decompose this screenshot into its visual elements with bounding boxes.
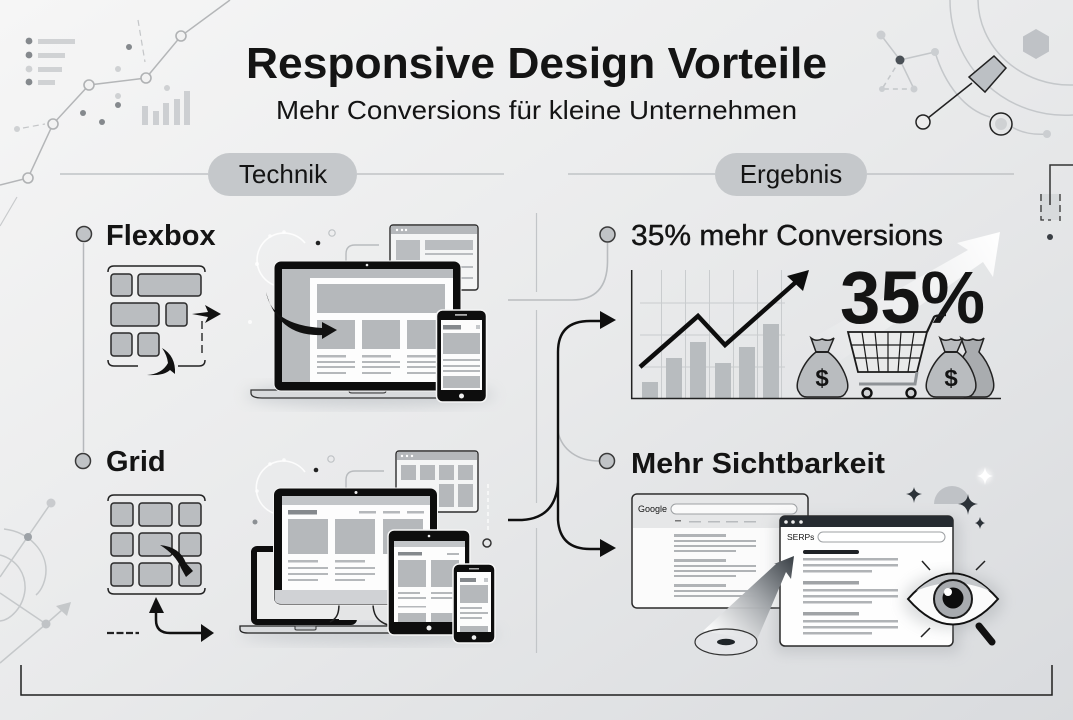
icon: money bags right <box>926 338 994 397</box>
arrow: into laptop <box>266 292 337 339</box>
panel: Mehr Sichtbarkeit <box>631 448 1003 655</box>
browser: Google results: Google <box>638 504 667 514</box>
icon: money bags right: $ <box>944 365 958 392</box>
panel: Flexbox <box>76 220 495 407</box>
heading: 35% mehr Conversions: 35% mehr Conversions <box>631 220 943 252</box>
icon: money bag left <box>797 338 848 397</box>
devices: monitor, laptop, tablet, phone <box>240 451 500 644</box>
browser: SERPs: SERPs <box>787 532 814 542</box>
subtitle: Mehr Conversions für kleine Unternehmen <box>276 95 797 125</box>
browser: Google results <box>632 494 808 608</box>
heading: Ergebnis <box>568 153 1014 196</box>
diagram: grid layout <box>107 495 214 642</box>
title: Responsive Design Vorteile <box>246 39 827 88</box>
connector: timeline left <box>82 243 84 452</box>
connector: Grid to visibility <box>558 432 614 468</box>
heading: Technik: Technik <box>239 159 328 189</box>
icon: shopping cart <box>848 315 946 398</box>
heading: Technik <box>60 153 504 196</box>
bar chart <box>632 270 1001 398</box>
heading: Grid: Grid <box>106 446 166 478</box>
node: Flexbox <box>76 226 92 242</box>
decoration: top-right arcs and network <box>876 0 1073 138</box>
panel: 35% mehr Conversions <box>631 220 1001 398</box>
heading: Mehr Sichtbarkeit: Mehr Sichtbarkeit <box>631 448 885 480</box>
divider <box>536 213 538 653</box>
node: Grid <box>76 454 90 468</box>
arrow: white growth <box>800 232 1000 368</box>
decoration: bottom-left network <box>0 498 71 663</box>
icon: sparkles <box>906 467 993 529</box>
decoration: top-left network and chart <box>0 0 230 226</box>
connector: Flexbox to conversions <box>508 227 615 300</box>
big number: 35% <box>840 256 985 339</box>
icon: spotlight arrow <box>695 556 794 655</box>
diagram: flexbox layout <box>108 266 221 375</box>
icon: eye with magnifier <box>903 561 1003 642</box>
devices: laptop and phone <box>245 225 495 407</box>
frame: bottom bracket <box>21 665 1052 695</box>
browser: SERPs <box>775 516 960 653</box>
arrows: results branch <box>508 311 616 557</box>
decoration: right edge bracket <box>1040 165 1073 240</box>
panel: Grid <box>76 446 500 644</box>
heading: Ergebnis: Ergebnis <box>740 159 842 189</box>
heading: Flexbox: Flexbox <box>106 220 216 252</box>
icon: money bag left: $ <box>815 365 829 392</box>
